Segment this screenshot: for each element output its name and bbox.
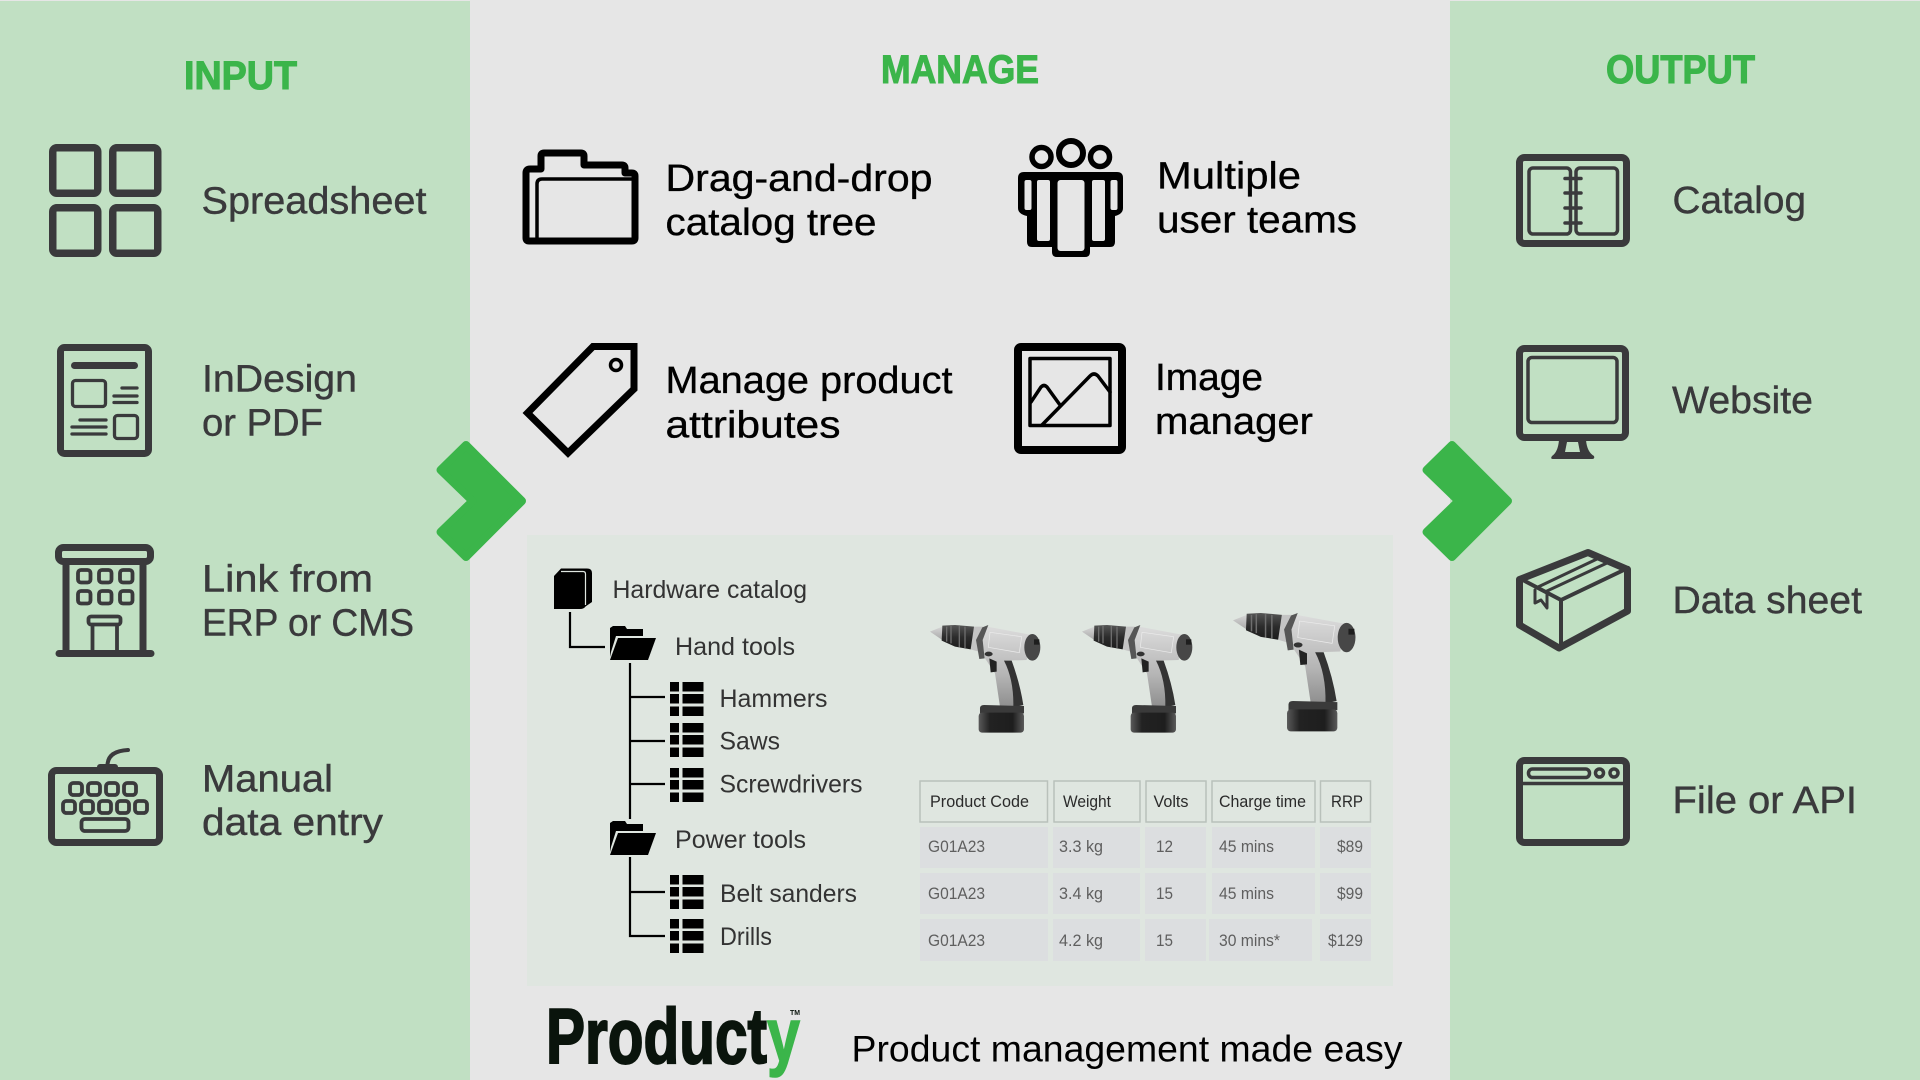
heading: manage: MANAGE [881, 48, 1039, 92]
heading: input: INPUT [184, 54, 297, 98]
icon: indesign or pdf page [60, 348, 148, 454]
table header labels: Product Code [930, 793, 1029, 811]
table row values: 15 [1156, 885, 1173, 903]
tree connectors [570, 612, 665, 936]
table row values: $129 [1328, 932, 1363, 950]
icon: table saws [670, 723, 704, 757]
table row values: 45 mins [1219, 885, 1274, 903]
table row values: $99 [1337, 885, 1363, 903]
icon: price tag [528, 346, 634, 453]
table header labels: RRP [1331, 793, 1363, 811]
label: link from erp or cms: ERP or CMS [202, 602, 414, 644]
label: manage product attributes: Manage product [666, 360, 953, 402]
logo: producty: y [767, 993, 800, 1078]
icon: cardboard box [1520, 552, 1628, 648]
label: website: Website [1672, 380, 1813, 422]
table row values [928, 838, 1363, 950]
label: file or api: File or API [1672, 780, 1857, 822]
tagline: Product management made easy [852, 1028, 1403, 1070]
label: hand tools: Hand tools [675, 633, 795, 661]
label: spreadsheet: Spreadsheet [202, 180, 427, 222]
icon: catalog book [1520, 158, 1626, 244]
label: indesign or pdf: InDesign [202, 358, 357, 400]
icon: table hammers [670, 682, 704, 716]
icon: drill 2 [1082, 625, 1192, 733]
panel: catalog example [527, 535, 1393, 986]
product images: drills [930, 613, 1355, 733]
arrow: manage to output [1426, 445, 1508, 557]
icon: spreadsheet [53, 148, 158, 253]
table row values: 15 [1156, 932, 1173, 950]
icon: keyboard [52, 750, 160, 842]
catalog tree [554, 568, 862, 953]
label: link from erp or cms: Link from [202, 558, 373, 600]
label: drag-and-drop catalog tree: catalog tree [666, 202, 876, 244]
icon: table belt sanders [670, 875, 704, 909]
label: drills: Drills [720, 923, 772, 951]
table header [920, 781, 1370, 822]
icon: building [58, 548, 151, 654]
label: manual data entry [202, 758, 383, 844]
icon: table drills [670, 919, 704, 953]
label: drag-and-drop catalog tree [666, 158, 932, 244]
label: drag-and-drop catalog tree: Drag-and-drop [666, 158, 932, 200]
label: indesign or pdf [202, 358, 357, 444]
label: image manager: manager [1155, 401, 1313, 443]
label: belt sanders: Belt sanders [720, 880, 857, 908]
label: indesign or pdf: or PDF [202, 402, 323, 444]
icon: folder power tools [610, 821, 656, 855]
logo: producty: Product [546, 992, 767, 1080]
table row values: G01A23 [928, 885, 985, 903]
label: power tools: Power tools [675, 826, 806, 854]
table row values: 45 mins [1219, 838, 1274, 856]
icon: catalog book [554, 568, 592, 609]
icon: monitor [1520, 348, 1626, 459]
label: saws: Saws [720, 728, 780, 756]
icon: drill 3 [1233, 613, 1355, 731]
icon: table screwdrivers [670, 768, 704, 802]
icon: browser window [1520, 760, 1626, 842]
table row values: G01A23 [928, 932, 985, 950]
label: hammers: Hammers [720, 685, 828, 713]
label: image manager [1155, 357, 1313, 443]
panel: input [0, 1, 470, 1080]
icon: image frame [1018, 347, 1122, 450]
table row values: 12 [1156, 838, 1173, 856]
label: multiple user teams: Multiple [1157, 156, 1301, 198]
label: hardware catalog: Hardware catalog [612, 576, 807, 604]
icon: folder [526, 153, 635, 241]
table row cells [920, 827, 1371, 961]
panel: manage [526, 48, 1403, 1080]
label: manage product attributes: attributes [666, 404, 840, 446]
product table [920, 781, 1371, 961]
label: manage product attributes [666, 360, 953, 446]
label: manual data entry: data entry [202, 802, 383, 844]
label: image manager: Image [1155, 357, 1263, 399]
icon: drill 1 [930, 625, 1040, 733]
heading: output: OUTPUT [1606, 48, 1755, 92]
panel: manage background [470, 0, 1450, 1080]
icon: user teams [1018, 141, 1123, 257]
label: multiple user teams [1157, 156, 1357, 242]
table header labels: Charge time [1219, 793, 1306, 811]
table row values: 30 mins* [1219, 932, 1281, 950]
table row values: 3.3 kg [1059, 838, 1103, 856]
table row values: G01A23 [928, 838, 985, 856]
table row values: 3.4 kg [1059, 885, 1103, 903]
table header labels [930, 793, 1363, 811]
logo: producty: TM [790, 1010, 800, 1017]
label: screwdrivers: Screwdrivers [720, 770, 862, 798]
arrow: input to manage [440, 445, 522, 557]
label: catalog: Catalog [1672, 180, 1806, 222]
table header labels: Volts [1154, 793, 1188, 811]
label: link from erp or cms [202, 558, 414, 644]
label: manual data entry: Manual [202, 758, 333, 800]
table header labels: Weight [1063, 793, 1111, 811]
label: multiple user teams: user teams [1157, 200, 1357, 242]
table row values: $89 [1337, 838, 1363, 856]
table row values: 4.2 kg [1059, 932, 1103, 950]
label: data sheet: Data sheet [1672, 580, 1862, 622]
icon: folder hand tools [610, 626, 656, 660]
panel: output [1450, 1, 1920, 1080]
